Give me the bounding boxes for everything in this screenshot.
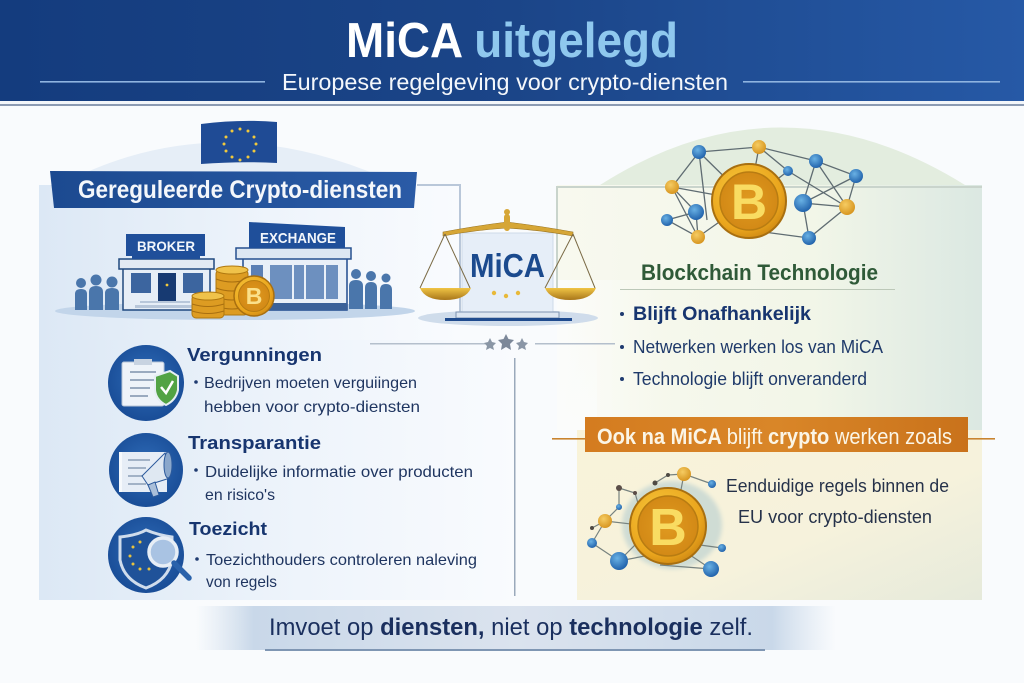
MiCA board bbox=[445, 233, 572, 321]
orange banner bbox=[552, 417, 995, 452]
text block bbox=[726, 476, 949, 527]
item: Vergunningen: hebben voor crypto-diensten bbox=[204, 399, 420, 416]
panel: regulated crypto services bbox=[39, 121, 515, 600]
illustration: broker and exchange bbox=[55, 222, 415, 320]
exchange building bbox=[236, 222, 351, 310]
exchange building: EXCHANGE bbox=[260, 230, 336, 247]
item: Toezicht: Toezicht bbox=[189, 519, 267, 539]
title: MiCA uitgelegd bbox=[346, 14, 678, 68]
coin stacks and bitcoin: B bbox=[246, 283, 262, 309]
icon: document with megaphone bbox=[109, 433, 183, 507]
icon: shield with magnifier bbox=[108, 517, 189, 593]
network with bitcoin bbox=[661, 140, 863, 245]
subtitle: Europese regelgeving voor crypto-diensten bbox=[282, 69, 728, 95]
network with bitcoin bbox=[587, 467, 726, 577]
network with bitcoin: B bbox=[649, 499, 687, 557]
footer banner bbox=[196, 606, 836, 651]
bullet list: Blijft Onafhankelijk bbox=[633, 304, 811, 325]
icon: MiCA scale bbox=[418, 209, 598, 326]
divider with stars bbox=[370, 334, 615, 596]
icon: clipboard with shield bbox=[108, 345, 184, 421]
header band bbox=[0, 0, 1024, 106]
item: Toezicht bbox=[108, 517, 477, 593]
icon: EU flag bbox=[201, 121, 277, 164]
item: Transparantie: Duidelijke informatie over producten bbox=[205, 464, 473, 481]
panel: blockchain technology bbox=[557, 128, 982, 430]
item: Transparantie bbox=[109, 433, 473, 507]
footer banner: Imvoet op diensten, niet op technologie zelf. bbox=[269, 614, 753, 641]
item: Toezicht: von regels bbox=[206, 574, 277, 591]
item: Vergunningen: Bedrijven moeten verguiingen bbox=[204, 375, 417, 392]
balance beam bbox=[420, 209, 596, 300]
bullet list: Technologie blijft onveranderd bbox=[633, 369, 867, 389]
coin stacks and bitcoin bbox=[192, 266, 274, 318]
item: Vergunningen: Vergunningen bbox=[187, 345, 322, 365]
text block: Eenduidige regels binnen de bbox=[726, 476, 949, 496]
broker building bbox=[119, 234, 214, 310]
item: Toezicht: Toezichthouders controleren naleving bbox=[206, 552, 477, 569]
bullet list: Netwerken werken los van MiCA bbox=[633, 337, 883, 357]
panel: crypto keeps working bbox=[552, 417, 995, 600]
text block: EU voor crypto-diensten bbox=[738, 507, 932, 527]
broker building: BROKER bbox=[137, 238, 195, 254]
item: Transparantie: en risico's bbox=[205, 487, 275, 504]
item: Vergunningen bbox=[108, 345, 420, 421]
people left bbox=[75, 274, 119, 310]
item: Transparantie: Transparantie bbox=[188, 433, 321, 453]
heading: Blockchain Technologie bbox=[641, 260, 878, 285]
bullet list bbox=[620, 304, 883, 389]
orange banner: Ook na MiCA blijft crypto werken zoals bbox=[597, 424, 952, 449]
network with bitcoin: B bbox=[731, 174, 767, 230]
heading banner: Gereguleerde Crypto-diensten bbox=[78, 176, 402, 204]
MiCA board: MiCA bbox=[470, 247, 545, 284]
people right bbox=[349, 269, 392, 309]
heading banner bbox=[50, 171, 417, 208]
